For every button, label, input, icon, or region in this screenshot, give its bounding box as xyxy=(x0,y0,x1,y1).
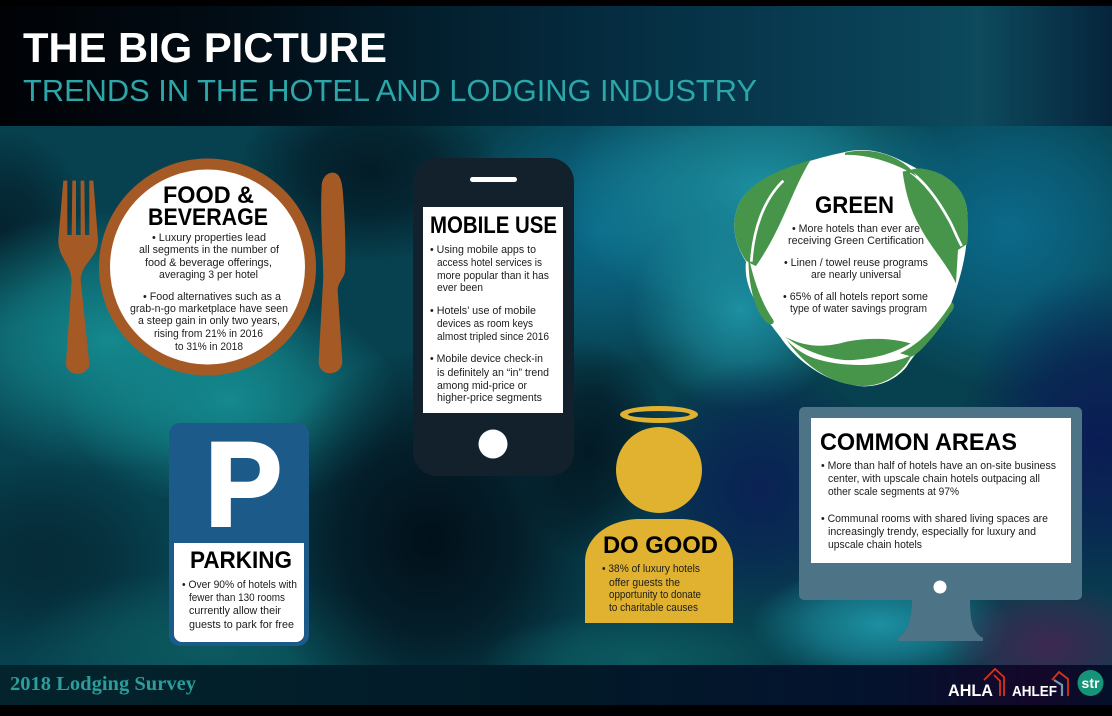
text block: • Linen / towel reuse programs xyxy=(784,257,928,269)
text block: food & beverage offerings, xyxy=(145,257,272,269)
heading: FOOD & xyxy=(163,182,254,209)
text block xyxy=(783,223,928,315)
text block: • 65% of all hotels report some xyxy=(783,291,928,303)
text block: higher-price segments xyxy=(437,392,542,404)
icon: home button xyxy=(478,430,508,458)
icon: fork xyxy=(58,181,98,374)
text block: other scale segments at 97% xyxy=(828,486,959,498)
header band xyxy=(0,0,1112,126)
icon: body xyxy=(585,519,733,623)
text block: fewer than 130 rooms xyxy=(189,592,285,604)
text block: upscale chain hotels xyxy=(828,539,922,551)
text block xyxy=(182,579,297,631)
text block: devices as room keys xyxy=(437,318,533,330)
text block xyxy=(602,563,701,614)
logo: AHLA xyxy=(948,669,1004,700)
text block: to 31% in 2018 xyxy=(175,341,243,353)
logo: AHLA: AHLA xyxy=(948,681,993,700)
subtitle: TRENDS IN THE HOTEL AND LODGING INDUSTRY xyxy=(23,73,757,108)
panel: common areas xyxy=(799,407,1082,641)
icon: phone body xyxy=(413,158,574,476)
icon: parking letter: P xyxy=(205,418,282,552)
text block: • Mobile device check-in xyxy=(430,353,543,365)
sign body xyxy=(169,423,309,646)
text block: opportunity to donate xyxy=(609,589,701,601)
text block: • Luxury properties lead xyxy=(152,232,266,244)
text block: to charitable causes xyxy=(609,602,698,614)
plate xyxy=(104,164,310,370)
heading: DO GOOD xyxy=(603,532,718,559)
icon: power button xyxy=(934,580,946,594)
text block: averaging 3 per hotel xyxy=(159,269,258,281)
icon: monitor stand xyxy=(898,598,983,641)
text block: guests to park for free xyxy=(189,619,294,631)
phone screen xyxy=(423,207,563,413)
text block: • Hotels’ use of mobile xyxy=(430,305,536,317)
text block: • Using mobile apps to xyxy=(430,244,536,256)
text block: ever been xyxy=(437,282,483,294)
monitor screen xyxy=(811,418,1071,563)
icon: head xyxy=(616,427,702,513)
panel: food and beverage: BEVERAGE xyxy=(148,204,268,231)
heading: PARKING xyxy=(190,547,292,574)
heading: COMMON AREAS xyxy=(820,429,1017,456)
panel: food and beverage xyxy=(58,164,345,374)
title: THE BIG PICTURE xyxy=(23,24,387,71)
heading: GREEN xyxy=(815,192,894,219)
logo: AHLEF: AHLEF xyxy=(1012,683,1057,700)
logo: str xyxy=(1078,670,1104,696)
text block: • More hotels than ever are xyxy=(792,223,920,235)
logo: AHLEF xyxy=(1012,672,1068,700)
text block: increasingly trendy, especially for luxury and xyxy=(828,526,1036,538)
text block: receiving Green Certification xyxy=(788,235,924,247)
text block: grab-n-go marketplace have seen xyxy=(130,303,288,315)
text block xyxy=(821,460,1056,551)
icon: phone speaker xyxy=(470,177,517,182)
text block: among mid-price or xyxy=(437,380,527,392)
text block xyxy=(430,244,549,404)
icon: knife xyxy=(319,173,345,373)
text block: all segments in the number of xyxy=(139,244,280,256)
text block: • Communal rooms with shared living spaces are xyxy=(821,513,1048,525)
text block: are nearly universal xyxy=(811,269,901,281)
text block: is definitely an “in” trend xyxy=(437,367,549,379)
text block: • More than half of hotels have an on-site business xyxy=(821,460,1056,472)
panel: green xyxy=(734,150,968,386)
text block xyxy=(130,232,288,353)
text block: • 38% of luxury hotels xyxy=(602,563,700,575)
text block: rising from 21% in 2016 xyxy=(154,328,263,340)
panel: do good xyxy=(585,406,733,623)
survey label: 2018 Lodging Survey xyxy=(10,673,196,695)
text block: currently allow their xyxy=(189,605,281,617)
panel: parking xyxy=(169,418,309,646)
text block: offer guests the xyxy=(609,577,680,589)
text block: more popular than it has xyxy=(437,270,549,282)
text block: access hotel services is xyxy=(437,257,542,269)
icon: leaf wreath xyxy=(734,150,968,386)
text block: center, with upscale chain hotels outpacing all xyxy=(828,473,1040,485)
text block: a steep gain in only two years, xyxy=(138,315,280,327)
footer band xyxy=(0,665,1112,716)
text block: almost tripled since 2016 xyxy=(437,331,549,343)
text block: • Over 90% of hotels with xyxy=(182,579,297,591)
icon: monitor body xyxy=(799,407,1082,600)
panel: mobile use xyxy=(413,158,574,476)
logo: str: str xyxy=(1082,675,1100,691)
text block: • Food alternatives such as a xyxy=(143,291,282,303)
icon: halo xyxy=(620,406,698,423)
white text panel xyxy=(174,543,304,642)
text block: type of water savings program xyxy=(790,303,927,315)
heading: MOBILE USE xyxy=(430,212,557,239)
